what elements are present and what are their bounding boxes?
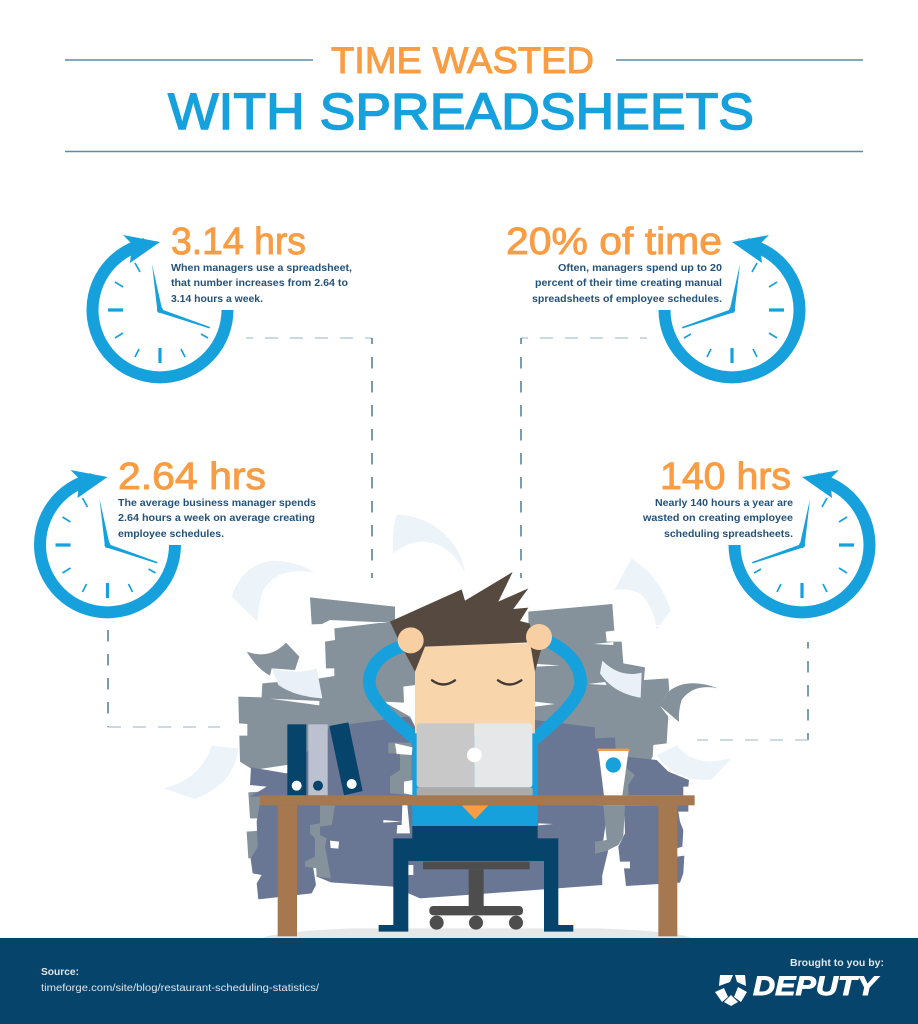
stat text: 20% of time: 20% of time xyxy=(506,221,722,263)
white gaps between sheets xyxy=(270,620,660,885)
face xyxy=(415,643,535,733)
icon: deputy logo xyxy=(715,975,747,1006)
stat text: 2.64 hrs: 2.64 hrs xyxy=(118,456,266,498)
stat text: 20% of time xyxy=(506,221,722,305)
stat text: 20% of time: Often, managers spend up to 20 xyxy=(558,262,722,274)
heading: time wasted: TIME WASTED xyxy=(331,40,594,81)
gray paper pile left xyxy=(238,597,420,858)
stat text: 20% of time: spreadsheets of employee schedules. xyxy=(532,293,722,305)
floor shadow xyxy=(258,928,695,940)
closed eyes xyxy=(432,680,521,684)
torso xyxy=(412,737,538,826)
hair xyxy=(390,572,541,672)
stat text: 140 hrs xyxy=(642,456,793,540)
illustration: stressed manager at desk xyxy=(163,515,732,940)
title block xyxy=(65,40,863,152)
stat text: 3.14 hrs: 3.14 hours a week. xyxy=(171,293,263,305)
clock: 3.14 hrs xyxy=(93,235,228,377)
stat text: 2.64 hrs: The average business manager spends xyxy=(118,497,316,509)
hands xyxy=(398,624,552,653)
blue paper pile right xyxy=(420,720,689,898)
dashed connector: 140 hrs xyxy=(697,642,808,740)
stat text: 3.14 hrs: When managers use a spreadsheet, xyxy=(171,262,352,274)
sponsor credit: Brought to you by: xyxy=(790,957,884,969)
heading: with spreadsheets: WITH SPREADSHEETS xyxy=(168,83,754,140)
laptop xyxy=(417,723,533,796)
coffee cup xyxy=(597,749,629,796)
footer bar xyxy=(0,938,918,1024)
stat text: 2.64 hrs: 2.64 hours a week on average creating xyxy=(118,512,315,524)
stat text: 140 hrs: 140 hrs xyxy=(660,456,791,498)
arms xyxy=(369,642,581,740)
stat text: 3.14 hrs: 3.14 hrs xyxy=(171,221,306,263)
binders xyxy=(287,722,363,795)
manager character xyxy=(369,572,581,932)
stat text: 140 hrs: Nearly 140 hours a year are xyxy=(655,497,793,509)
trousers xyxy=(379,826,573,932)
stat text: 3.14 hrs xyxy=(171,221,352,305)
blue paper pile left xyxy=(250,717,420,899)
flying papers xyxy=(163,515,732,799)
stat text: 140 hrs: scheduling spreadsheets. xyxy=(664,528,793,540)
dashed connector: 2.64 hrs xyxy=(108,630,220,727)
stat text: 2.64 hrs xyxy=(118,456,316,540)
source text: timeforge.com/site/blog/restaurant-scheduling-statistics/ xyxy=(41,982,319,994)
dashed connector: 20% of time xyxy=(521,338,647,578)
source text: Source: xyxy=(41,966,79,978)
flying gray sheets xyxy=(247,643,718,722)
source text xyxy=(41,966,319,994)
chair xyxy=(423,862,530,930)
stat text: 2.64 hrs: employee schedules. xyxy=(118,528,224,540)
stat text: 140 hrs: wasted on creating employee xyxy=(642,512,793,524)
gray paper pile right xyxy=(528,604,669,795)
clock: 2.64 hrs xyxy=(40,470,175,612)
desk xyxy=(260,795,695,936)
stat text: 3.14 hrs: that number increases from 2.64 to xyxy=(171,277,348,289)
dashed connector: 3.14 hrs xyxy=(246,338,372,578)
clock: 140 hrs xyxy=(734,470,869,612)
falling pale sheets xyxy=(272,661,642,698)
stat text: 20% of time: percent of their time creating manual xyxy=(535,277,722,289)
logo wordmark: DEPUTY xyxy=(753,971,880,1001)
gray patches between blue sheets xyxy=(305,743,625,878)
clock: 20% of time xyxy=(664,235,799,377)
tie xyxy=(462,805,488,819)
